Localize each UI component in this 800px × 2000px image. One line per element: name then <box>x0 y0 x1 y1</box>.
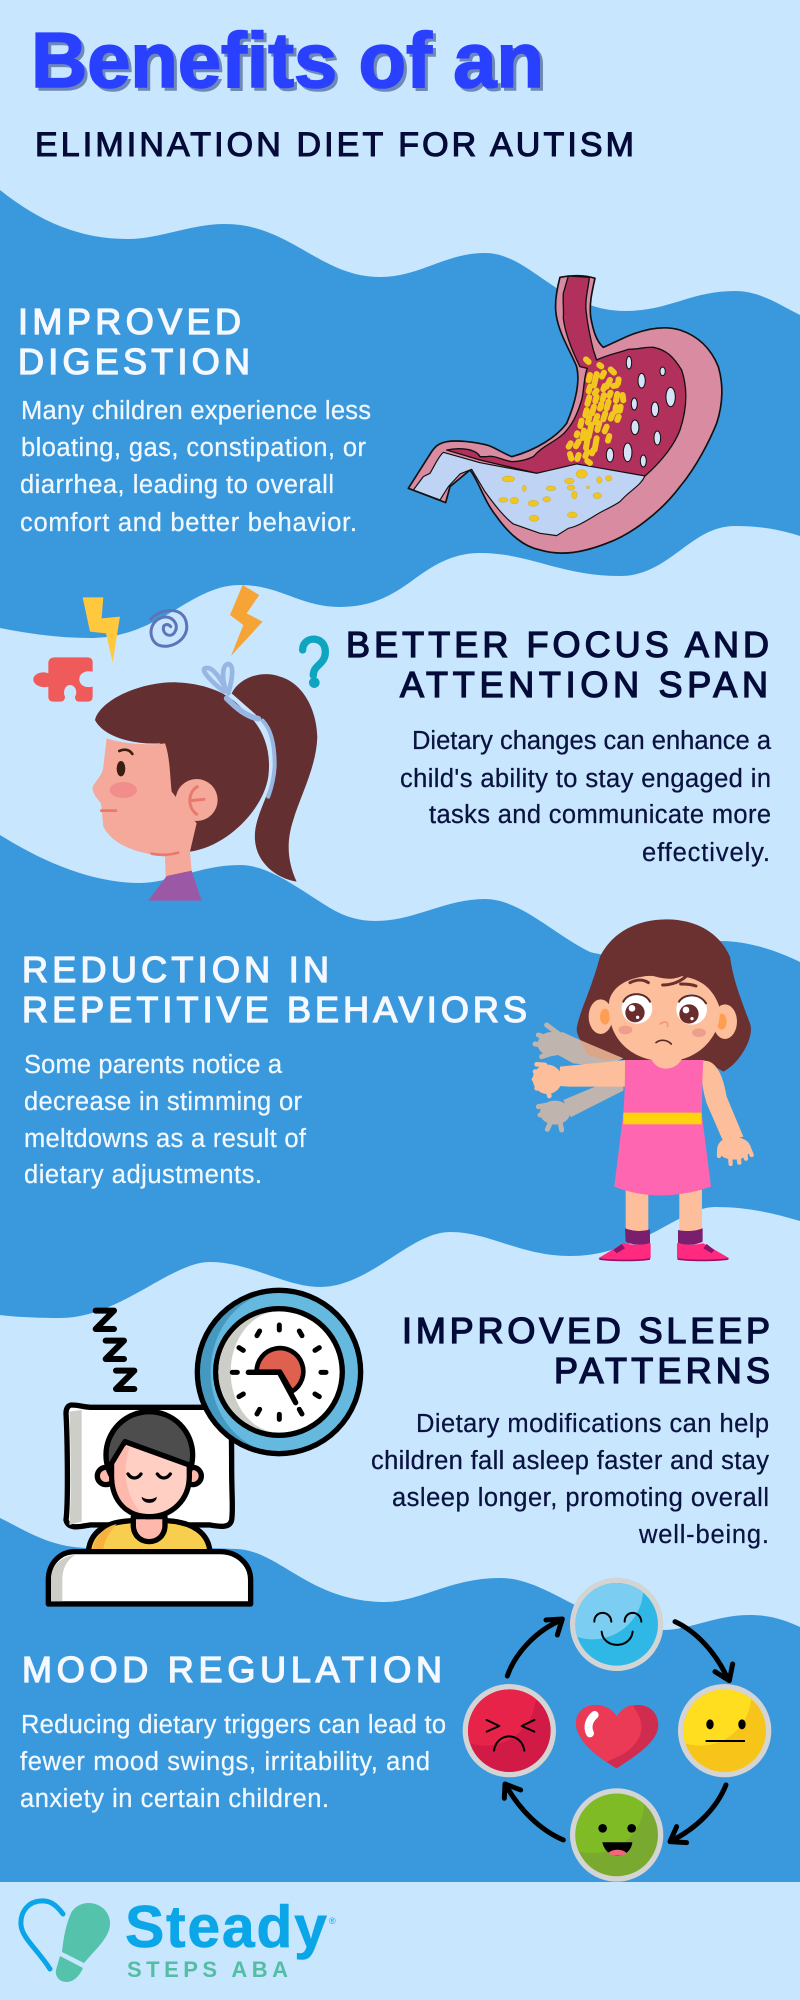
cheeks <box>618 1026 632 1034</box>
icon: child profile with ponytail <box>33 585 325 901</box>
heading: improved digestion <box>18 301 250 382</box>
heading: improved digestion: IMPROVED <box>18 301 241 342</box>
text: improved sleep <box>371 1410 769 1549</box>
heading: better focus <box>346 624 769 705</box>
heading: improved sleep: IMPROVED SLEEP <box>402 1310 770 1351</box>
bangs <box>608 943 723 1007</box>
icon: sleeping child and clock <box>48 1290 361 1604</box>
text: repetitive behaviors <box>24 1051 307 1189</box>
heading: repetitive behaviors <box>22 949 527 1030</box>
heading: improved sleep <box>402 1310 770 1391</box>
dress <box>614 1060 711 1195</box>
text: improved sleep: Dietary modifications can help <box>416 1410 769 1438</box>
text: better focus: child's ability to stay engaged in <box>400 765 771 793</box>
panel: mood regulation <box>20 1578 772 1882</box>
text: better focus <box>400 727 772 867</box>
face: happy blue <box>570 1578 664 1671</box>
text: improved digestion: bloating, gas, constipation, or <box>21 434 366 462</box>
text: improved sleep: asleep longer, promoting overall <box>392 1484 769 1512</box>
text: mood regulation: fewer mood swings, irritability, and <box>20 1748 430 1776</box>
text: mood regulation: Reducing dietary triggers can lead to <box>21 1711 446 1739</box>
arrows: cycle <box>504 1619 733 1843</box>
subtitle: ELIMINATION DIET FOR AUTISM <box>35 126 634 164</box>
icon: question mark <box>303 639 325 688</box>
text: better focus: Dietary changes can enhance a <box>412 727 772 755</box>
face <box>92 738 197 877</box>
nose and mouth <box>660 1022 668 1027</box>
ponytail <box>232 674 317 882</box>
shirt <box>148 871 202 901</box>
heading: improved digestion: DIGESTION <box>18 341 250 382</box>
registered mark: ® <box>329 1916 336 1926</box>
text: improved sleep: children fall asleep faster and stay <box>371 1447 769 1475</box>
heading: improved sleep: PATTERNS <box>554 1350 770 1391</box>
face: neutral yellow <box>678 1684 772 1778</box>
ribbon <box>204 664 275 797</box>
icon: puzzle piece <box>33 657 93 702</box>
blanket <box>48 1552 251 1604</box>
wave band: mood regulation <box>0 1518 800 1882</box>
icon: emotion cycle <box>462 1578 772 1882</box>
heading: repetitive behaviors: REDUCTION IN <box>22 949 329 990</box>
face <box>609 975 720 1061</box>
text: repetitive behaviors: dietary adjustments. <box>24 1161 262 1189</box>
title: Benefits of an <box>31 16 544 104</box>
wave band: digestion <box>0 190 800 638</box>
icon: stomach <box>408 276 722 553</box>
child <box>88 1412 210 1552</box>
panel: repetitive behaviors <box>22 919 752 1261</box>
heading: better focus: BETTER FOCUS AND <box>346 624 769 665</box>
text: improved sleep: well-being. <box>638 1521 769 1549</box>
wave band: repetitive behaviors <box>0 835 800 1318</box>
pillow <box>66 1405 232 1527</box>
hair <box>95 682 269 852</box>
socks <box>625 1228 703 1245</box>
text: improved digestion: Many children experience less <box>21 397 371 425</box>
text: mood regulation <box>20 1711 446 1813</box>
icon: orange lightning <box>230 585 263 656</box>
panel: improved digestion <box>18 276 722 553</box>
text: mood regulation: anxiety in certain children. <box>20 1785 329 1813</box>
heading: repetitive behaviors: REPETITIVE BEHAVIORS <box>22 989 527 1030</box>
text: repetitive behaviors: meltdowns as a result of <box>24 1125 307 1153</box>
heading: better focus: ATTENTION SPAN <box>400 664 768 705</box>
heading: mood regulation: MOOD REGULATION <box>22 1649 442 1690</box>
icon: zzz <box>96 1311 134 1389</box>
text: improved digestion: diarrhea, leading to overall <box>20 471 334 499</box>
icon: heart and footprint <box>21 1901 110 1982</box>
face: angry red <box>462 1684 556 1778</box>
ears <box>589 999 613 1034</box>
neck <box>652 1059 682 1069</box>
panel: improved sleep <box>48 1290 770 1604</box>
hair <box>577 919 751 1072</box>
shoes <box>598 1243 729 1261</box>
arms <box>558 1060 627 1087</box>
clock <box>197 1290 361 1454</box>
icon: yellow lightning <box>83 597 120 663</box>
text: better focus: effectively. <box>642 839 770 867</box>
text: improved digestion: comfort and better behavior. <box>20 509 357 537</box>
ghost arms <box>535 1025 623 1130</box>
logo: Steady Steps ABA <box>21 1894 336 1982</box>
text: better focus: tasks and communicate more <box>429 801 771 829</box>
icon: girl flapping arm <box>533 919 752 1261</box>
text: repetitive behaviors: Some parents notice a <box>24 1051 283 1079</box>
panel: better focus <box>33 585 772 901</box>
icon: heart <box>576 1705 658 1768</box>
legs <box>626 1190 648 1233</box>
wordmark: Steps ABA: STEPS ABA <box>127 1957 288 1982</box>
face: laughing green <box>570 1788 664 1882</box>
eyes <box>622 993 652 1024</box>
icon: spiral <box>151 611 187 646</box>
text: repetitive behaviors: decrease in stimming or <box>24 1088 302 1116</box>
text: improved digestion <box>20 397 371 537</box>
wordmark: Steady: Steady <box>125 1894 327 1960</box>
